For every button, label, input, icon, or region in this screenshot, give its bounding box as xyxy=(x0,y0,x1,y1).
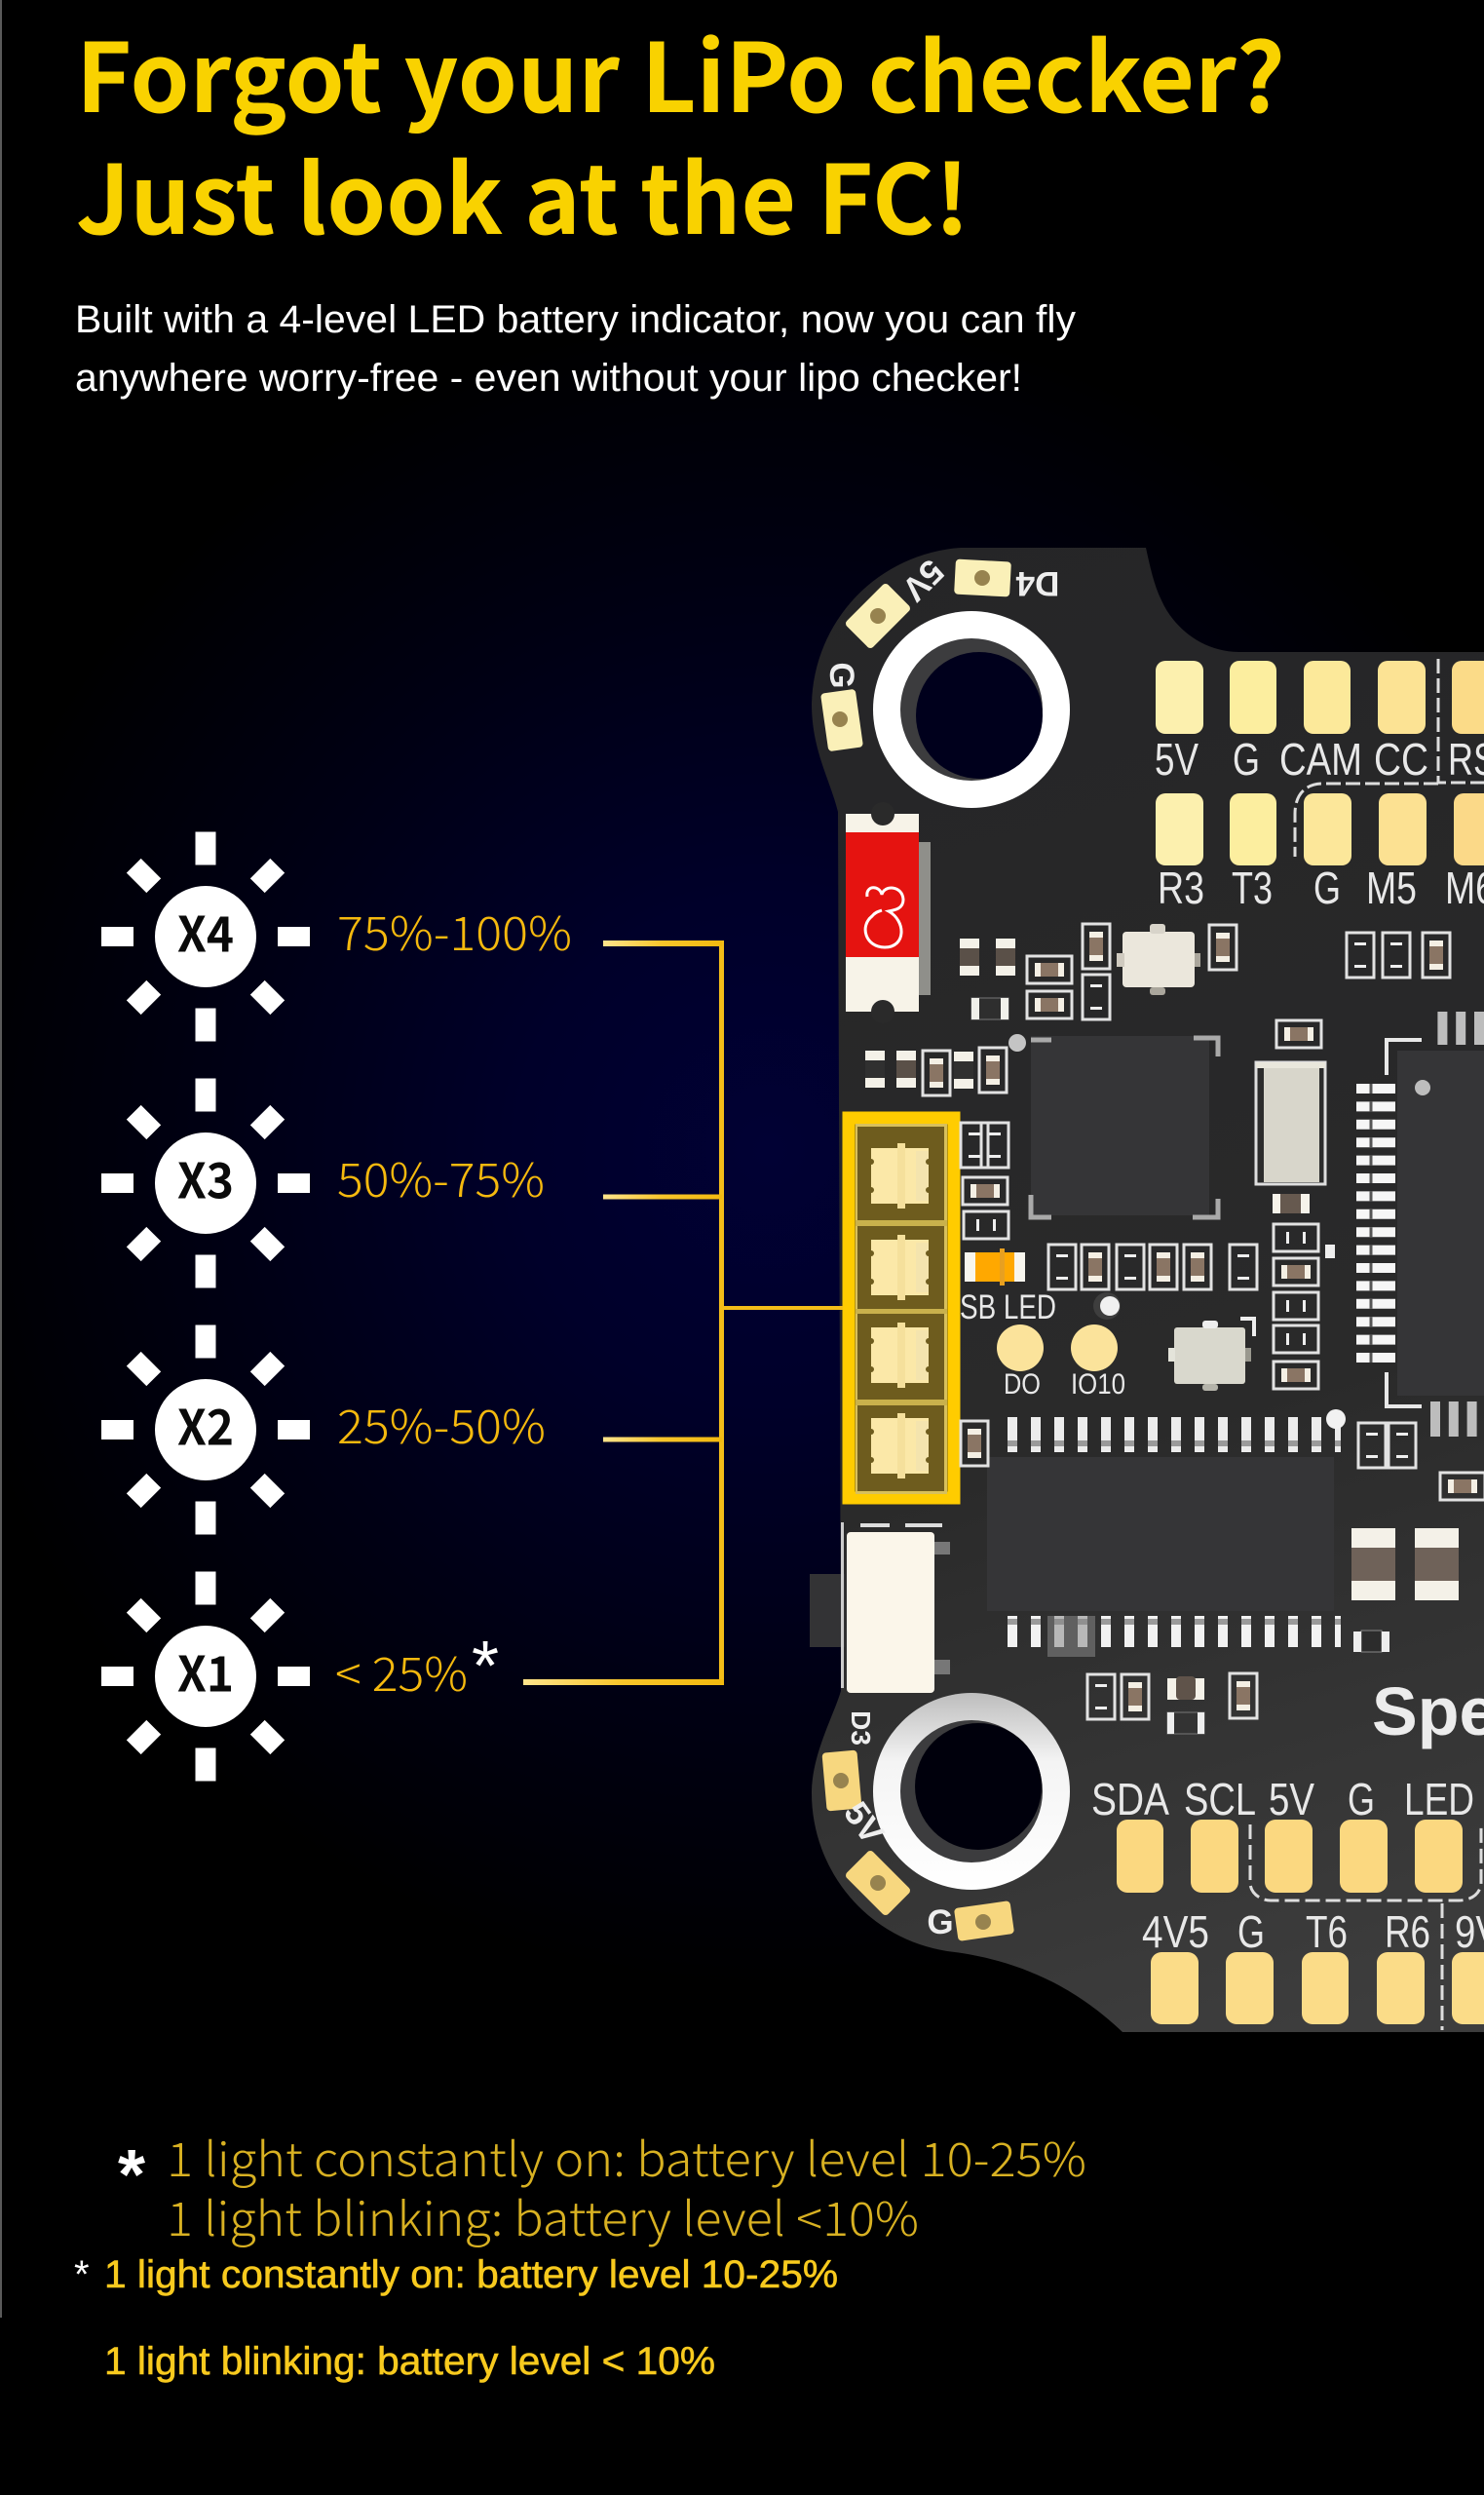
board outline xyxy=(812,548,1484,2032)
orange LED xyxy=(965,1248,1025,1286)
components right of LEDs xyxy=(961,1123,1335,1389)
top silkscreen labels xyxy=(1155,734,1484,913)
level row: X2: X2 xyxy=(177,1390,234,1460)
top corner pads: G xyxy=(822,662,860,689)
bottom corner pads: G xyxy=(927,1903,954,1941)
bottom silkscreen labels: G xyxy=(1237,1906,1265,1957)
top silkscreen labels: CC xyxy=(1374,734,1428,785)
level row: X1: * xyxy=(472,1628,499,1706)
bottom silkscreen labels: SCL xyxy=(1184,1774,1256,1824)
level row: X3 xyxy=(101,1078,545,1288)
top silkscreen labels: R3 xyxy=(1158,863,1204,913)
bottom silkscreen labels: T6 xyxy=(1306,1906,1348,1957)
level row: X3: X3 xyxy=(177,1142,234,1212)
connector lines xyxy=(523,940,843,1685)
lower footnote: 1 light constantly on: battery level 10-25% xyxy=(104,2253,838,2296)
upper footnote: * xyxy=(118,2136,145,2214)
bottom silkscreen labels xyxy=(1091,1774,1484,1957)
LED indicator box xyxy=(849,1118,954,1498)
top silkscreen labels: 5V xyxy=(1155,734,1199,785)
top silkscreen labels: CAM xyxy=(1279,734,1362,785)
top silkscreen labels: M5 xyxy=(1366,863,1417,913)
level row: X1: < 25% xyxy=(335,1636,468,1705)
title: Forgot your LiPo checker? xyxy=(76,2,1285,140)
lower footnote: 1 light blinking: battery level < 10% xyxy=(104,2340,715,2383)
flight controller board xyxy=(810,548,1484,2032)
top corner pads: 5V xyxy=(894,552,951,609)
long IC xyxy=(987,1409,1346,1657)
level row: X1: X1 xyxy=(177,1635,234,1706)
bottom corner pads: 5V xyxy=(836,1795,892,1852)
top solder pads row 2 xyxy=(1156,793,1484,865)
silver button top xyxy=(1117,924,1200,995)
intro text: anywhere worry-free - even without your lipo checker! xyxy=(75,357,1022,400)
round pads DO IO10: DO xyxy=(1004,1368,1041,1401)
level row: X4: X4 xyxy=(177,897,234,967)
level row: X2: 25%-50% xyxy=(337,1389,546,1457)
title: Just look at the FC! xyxy=(76,124,970,262)
level row: X3: 50%-75% xyxy=(337,1142,545,1210)
top corner pads xyxy=(820,552,1059,751)
components lower area xyxy=(1087,1673,1257,1734)
top silkscreen labels: G xyxy=(1233,734,1260,785)
bottom corner pads xyxy=(821,1710,1014,1941)
power switch xyxy=(810,1522,950,1693)
intro text xyxy=(75,298,1076,400)
level row: X4 xyxy=(101,832,572,1041)
lower footnote xyxy=(74,2253,838,2383)
main MCU chip xyxy=(1371,1028,1484,1419)
upper footnote: 1 light constantly on: battery level 10-25% xyxy=(167,2122,1086,2190)
red fuse xyxy=(846,802,931,1023)
components around long IC xyxy=(961,1421,1484,1652)
lower footnote: * xyxy=(74,2253,90,2296)
status dot xyxy=(1093,1292,1121,1320)
level row: X2 xyxy=(101,1325,546,1534)
small components upper area xyxy=(865,924,1450,1095)
bottom silkscreen labels: G xyxy=(1348,1774,1375,1824)
bottom silkscreen labels: R6 xyxy=(1385,1906,1430,1957)
level row: X4: 75%-100% xyxy=(337,896,572,964)
round pads DO IO10 xyxy=(997,1324,1125,1401)
USB LED label: SB LED xyxy=(960,1288,1056,1326)
top corner pads: D4 xyxy=(1015,564,1059,602)
bottom solder pads row 2 xyxy=(1151,1952,1484,2024)
bottom silkscreen labels: SDA xyxy=(1091,1774,1169,1824)
title xyxy=(76,2,1285,262)
top solder pads row 1 xyxy=(1156,661,1484,734)
bottom mounting hole xyxy=(873,1693,1070,1890)
intro text: Built with a 4-level LED battery indicator, now you can fly xyxy=(75,298,1076,341)
crystal xyxy=(1256,1062,1325,1213)
silver button lower xyxy=(1168,1319,1254,1391)
bottom silkscreen labels: 5V xyxy=(1269,1774,1314,1824)
chip: square IC xyxy=(1031,1036,1218,1217)
bottom corner pads: D3 xyxy=(846,1710,876,1746)
bottom silkscreen labels: 4V5 xyxy=(1142,1906,1209,1957)
upper footnote: 1 light blinking: battery level <10% xyxy=(167,2181,919,2249)
level row: X1 xyxy=(101,1571,499,1782)
top silkscreen labels: T3 xyxy=(1232,863,1273,913)
bottom solder pads row 1 xyxy=(1117,1820,1463,1893)
round pads DO IO10: IO10 xyxy=(1071,1368,1125,1401)
top mounting hole xyxy=(873,611,1070,808)
upper footnote xyxy=(118,2122,1086,2249)
top silkscreen labels: G xyxy=(1313,863,1341,913)
